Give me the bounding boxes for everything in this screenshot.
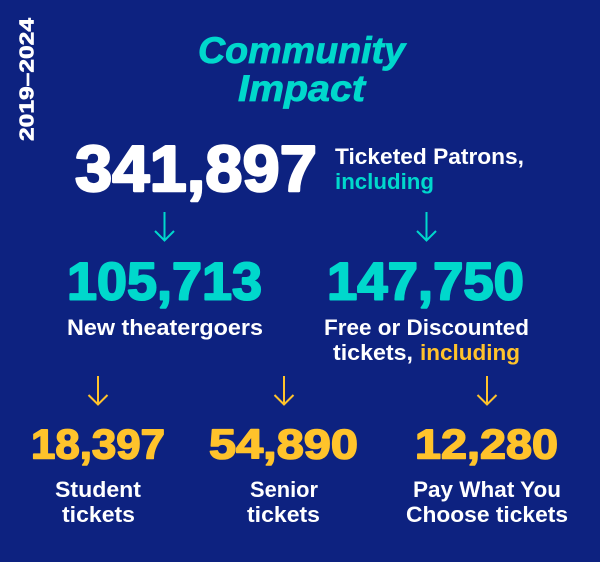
stat: senior tickets: 54,890 — [209, 420, 358, 468]
stat: student tickets: 18,397 — [31, 420, 165, 468]
stat: pay what you choose tickets: Choose tickets — [406, 502, 568, 527]
title: Impact — [238, 68, 367, 109]
arrow: to student tickets — [88, 376, 108, 404]
stat: student tickets: tickets — [62, 502, 135, 527]
title: Community — [198, 30, 407, 71]
arrow: to new theatergoers — [155, 212, 174, 240]
arrow: to senior tickets — [274, 376, 294, 404]
stat: pay what you choose tickets: Pay What You — [413, 477, 561, 502]
stat: senior tickets: tickets — [247, 502, 320, 527]
date range rotated label: 2019–2024 — [16, 17, 38, 141]
stat: new theatergoers: 105,713 — [67, 252, 262, 312]
headline stat: ticketed patrons: 341,897 — [75, 132, 317, 205]
arrow: to free or discounted — [417, 212, 436, 240]
stat: free or discounted tickets: including — [420, 340, 520, 365]
stat: pay what you choose tickets — [406, 420, 568, 527]
stat: free or discounted tickets: tickets, — [333, 340, 413, 365]
stat: free or discounted tickets: Free or Discounted — [324, 315, 529, 340]
stat: senior tickets — [209, 420, 358, 527]
stat: pay what you choose tickets: 12,280 — [415, 420, 558, 468]
stat: free or discounted tickets — [324, 252, 529, 365]
stat: senior tickets: Senior — [250, 477, 318, 502]
arrow: to pay what you choose tickets — [478, 376, 496, 404]
stat: free or discounted tickets: 147,750 — [327, 252, 524, 312]
title — [198, 30, 407, 109]
headline stat: ticketed patrons: including — [335, 169, 434, 194]
stat: new theatergoers — [67, 252, 263, 340]
stat: student tickets: Student — [55, 477, 142, 502]
headline stat: ticketed patrons: Ticketed Patrons, — [335, 144, 524, 169]
stat: new theatergoers: New theatergoers — [67, 315, 263, 340]
stat: student tickets — [31, 420, 165, 527]
headline stat: ticketed patrons — [75, 132, 524, 205]
